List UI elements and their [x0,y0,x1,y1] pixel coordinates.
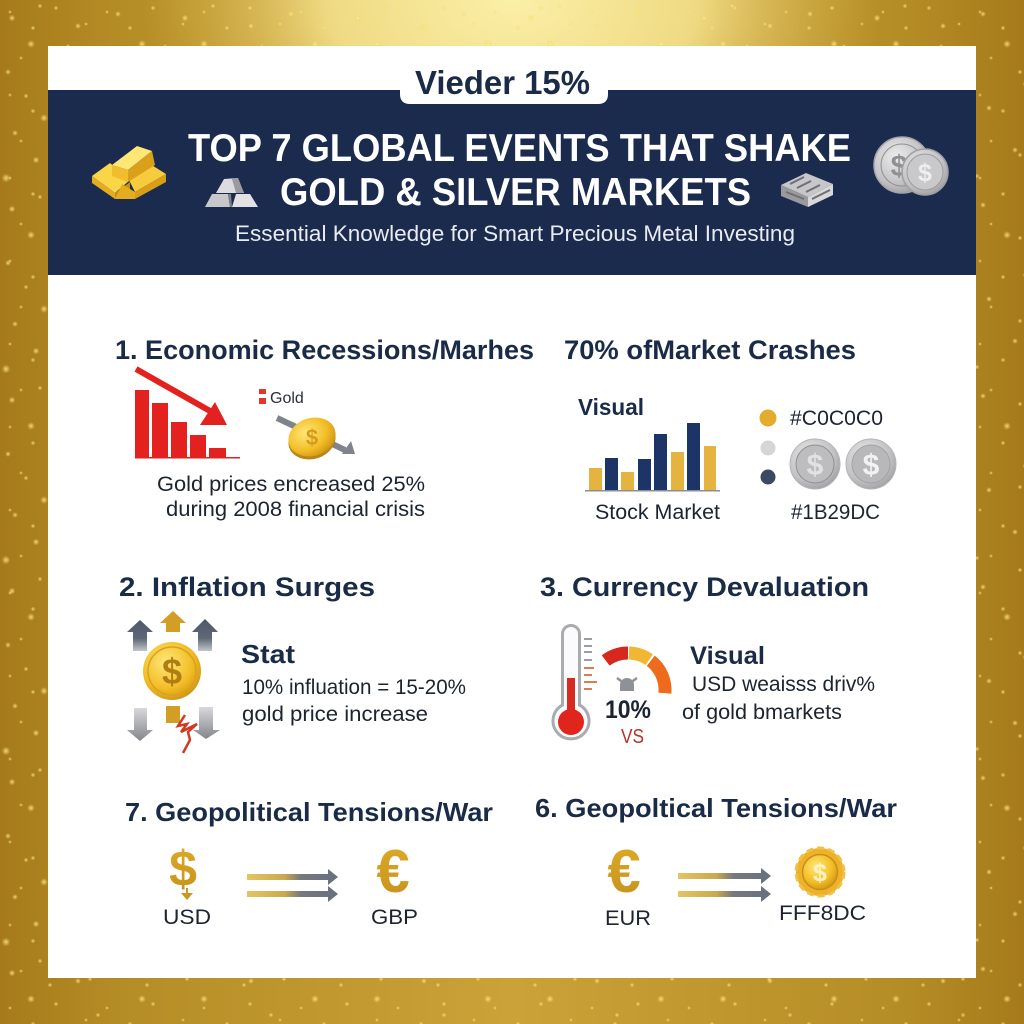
arrows: usd to gbp [247,869,338,902]
panel: navy header banner [48,90,976,275]
legend: gold: Gold [270,390,304,407]
icon: silver dollar coins: $ [807,449,824,482]
icon: coin with arrows: $ [162,651,182,692]
legend dots [760,410,776,484]
label: FFF8DC: FFF8DC [779,902,866,925]
text: gold prices stat [157,473,425,521]
panel: 3. currency devaluation [540,572,875,748]
label: visual: Visual [578,394,644,420]
icon: silver coins: $ [918,159,932,187]
icon: silver dollar coins [790,439,896,489]
icon: silver dollar coins: $ [863,449,880,482]
panel: 6. geopolitical tensions [535,793,897,930]
icon: gold badge coin [796,848,844,896]
panel: 1. economic recessions [115,335,534,521]
label: #1B29DC: #1B29DC [791,501,880,524]
icon: silver bar stack [781,173,833,207]
label: VS: VS [621,726,644,748]
label: GBP: GBP [371,906,418,929]
icon: gold coin with down arrow: $ [306,425,318,450]
text: usd note: USD weaisss driv% [692,673,875,696]
title: GOLD & SILVER MARKETS [280,171,751,214]
heading: 70% ofMarket Crashes [564,335,856,365]
heading: 3. Currency Devaluation [540,572,869,602]
chart: stock market bars [585,423,720,492]
panel: 7. geopolitical tensions [125,797,493,929]
text: inflation stat: 10% influation = 15-20% [242,676,466,699]
subtitle: Essential Knowledge for Smart Precious Metal Investing [235,221,795,246]
icon: dollar sign: $ [169,841,197,897]
heading: 1. Economic Recessions/Marhes [115,335,534,365]
heading: 7. Geopolitical Tensions/War [125,797,493,827]
icon: gauge [606,653,665,693]
text: gold prices stat: during 2008 financial crisis [166,498,425,521]
text: usd note: of gold bmarkets [682,701,842,724]
icon: gold badge coin: $ [813,859,827,887]
icon: euro sign: € [607,838,641,905]
title [188,127,851,214]
panel: 2. inflation surges [119,572,466,753]
text: inflation stat [242,676,466,726]
title: TOP 7 GLOBAL EVENTS THAT SHAKE [188,127,851,170]
label: USD: USD [163,906,211,929]
text: gold prices stat: Gold prices encreased 25% [157,473,425,496]
text: inflation stat: gold price increase [242,703,428,726]
icon: coin with arrows [127,611,220,753]
stat: 10%: 10% [605,696,651,724]
label: stat: Stat [241,639,295,669]
label: visual: Visual [690,642,765,670]
label: #C0C0C0: #C0C0C0 [790,407,883,430]
text: usd note [682,673,875,724]
label: EUR: EUR [605,907,651,930]
panel: 70% of market crashes [564,335,896,524]
icon: euro sign: € [376,838,410,905]
label: stock market: Stock Market [595,501,720,524]
icon: gold coin with down arrow [277,412,355,465]
chart: falling red bars with arrow [135,369,240,458]
tab: Vieder 15%: Vieder 15% [415,64,590,101]
heading: 2. Inflation Surges [119,572,375,602]
icon: thermometer [553,626,597,739]
arrows: eur to fff8dc [678,868,771,902]
icon: gold bars [92,146,166,199]
icon: silver coins [874,137,948,195]
icon: silver bars [205,178,258,207]
icon: silver coins: $ [891,150,908,183]
heading: 6. Geopoltical Tensions/War [535,793,897,823]
